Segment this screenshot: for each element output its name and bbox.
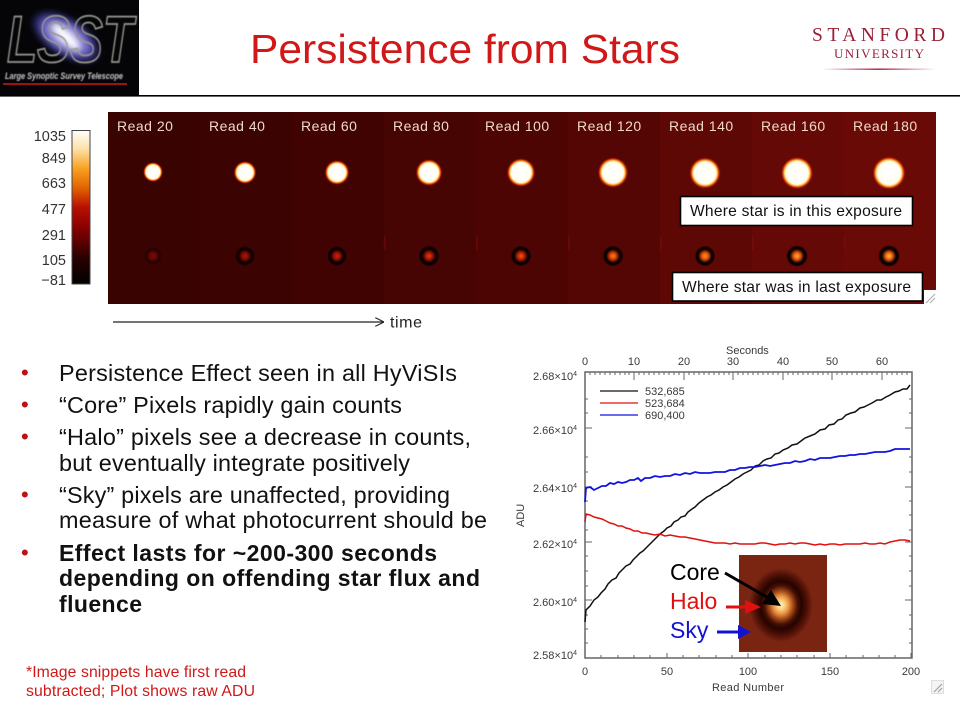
read labels: Read 40	[209, 118, 265, 134]
y axis labels: 2.66×10	[533, 425, 573, 437]
bullet 3: “Halo” pixels see a decrease in counts,	[59, 424, 471, 450]
series legend	[600, 386, 685, 422]
top axis labels: 60	[876, 356, 888, 368]
colour scale bar: 477	[42, 202, 66, 218]
label: Halo with arrow	[670, 588, 761, 614]
footnote: *Image snippets have first read	[26, 664, 246, 681]
colour scale bar: −81	[41, 273, 66, 289]
y axis labels: 4	[573, 371, 577, 378]
label: Halo with arrow: Halo	[670, 588, 717, 614]
label: Core with arrow: Core	[670, 559, 720, 585]
x axis labels: 50	[661, 666, 673, 678]
bullet 4	[21, 482, 487, 533]
label: Core with arrow	[670, 559, 781, 606]
logo: LSST	[0, 0, 139, 95]
y axis labels: 4	[573, 597, 577, 604]
colour scale bar: 849	[42, 151, 66, 167]
logo caption: Large Synoptic Survey Telescope	[5, 71, 124, 82]
x axis labels: 0	[582, 666, 588, 678]
bullet 5: •	[21, 540, 29, 565]
read labels	[117, 118, 918, 134]
bullet 4: measure of what photocurrent should be	[59, 507, 487, 533]
inset: star image with core halo and sky	[739, 555, 827, 652]
footnote: subtracted; Plot shows raw ADU	[26, 683, 255, 700]
top axis labels: 10	[628, 356, 640, 368]
bullet 2: •	[21, 392, 29, 417]
logo letters: LSST	[7, 2, 136, 76]
read labels: Read 60	[301, 118, 357, 134]
bullet 3: •	[21, 424, 29, 449]
top axis labels: 40	[777, 356, 789, 368]
top axis labels	[582, 345, 888, 368]
series legend: 523,684	[645, 398, 685, 410]
top axis labels: 50	[826, 356, 838, 368]
read labels: Read 20	[117, 118, 173, 134]
bullet 5: depending on offending star flux and	[59, 565, 480, 591]
y axis labels	[515, 371, 577, 662]
y axis labels: 2.60×10	[533, 597, 573, 609]
label: Sky with arrow: Sky	[670, 617, 709, 643]
logo: Stanford University: STANFORD	[812, 25, 945, 46]
persistence images from last exposure	[144, 244, 900, 268]
read labels: Read 140	[669, 118, 734, 134]
colour scale bar: 291	[42, 228, 66, 244]
y axis labels: 4	[573, 650, 577, 657]
series: blue sky	[585, 449, 910, 502]
bullet 5: Effect lasts for ~200-300 seconds	[59, 540, 437, 566]
y axis labels: 2.68×10	[533, 371, 573, 383]
bullet 5: fluence	[59, 591, 142, 617]
line chart: ADU vs read number	[515, 345, 920, 694]
callout: current star	[680, 196, 912, 226]
y axis labels: ADU	[515, 504, 527, 527]
top axis labels: 0	[582, 356, 588, 368]
y axis labels: 2.64×10	[533, 483, 573, 495]
colour scale bar: 663	[42, 176, 66, 192]
bullet 3	[21, 424, 471, 476]
series: red halo	[585, 514, 910, 545]
read labels: Read 100	[485, 118, 550, 134]
colour scale bar: 105	[42, 253, 66, 269]
bullet 5	[21, 540, 480, 617]
logo: Stanford University	[812, 25, 945, 70]
image strip: star snapshots per read	[108, 112, 936, 304]
read labels: Read 120	[577, 118, 642, 134]
x axis labels: 150	[821, 666, 839, 678]
resize handle	[924, 290, 936, 304]
current star positions	[143, 156, 906, 190]
colour scale bar: 1035	[34, 129, 66, 145]
y axis labels: 4	[573, 539, 577, 546]
callout: previous star: Where star was in last exposure	[682, 279, 911, 296]
read labels: Read 180	[853, 118, 918, 134]
bullet 4: •	[21, 482, 29, 507]
x axis labels	[582, 666, 920, 694]
bullet 1: Persistence Effect seen in all HyViSIs	[59, 360, 457, 386]
callout: current star: Where star is in this exposure	[690, 203, 902, 220]
read labels: Read 80	[393, 118, 449, 134]
y axis labels: 2.58×10	[533, 650, 573, 662]
footnote	[26, 664, 255, 700]
bullet list	[21, 360, 487, 617]
panel edge streaks	[384, 236, 846, 250]
y axis labels: 4	[573, 425, 577, 432]
arrow: time: time	[390, 314, 422, 332]
bullet 3: but eventually integrate positively	[59, 450, 410, 476]
logo: Stanford University: UNIVERSITY	[834, 46, 925, 61]
x axis labels: 200	[902, 666, 920, 678]
top axis labels: 30	[727, 356, 739, 368]
title: Persistence from Stars	[250, 26, 680, 72]
resize handle	[932, 680, 944, 694]
bullet 1: •	[21, 360, 29, 385]
plot frame and ticks	[585, 372, 912, 658]
top axis labels: Seconds	[726, 345, 769, 357]
label: Sky with arrow	[670, 617, 751, 643]
callout: previous star	[672, 272, 922, 301]
read labels: Read 160	[761, 118, 826, 134]
series legend: 690,400	[645, 410, 685, 422]
x axis labels: 100	[739, 666, 757, 678]
series: black core	[585, 385, 910, 622]
series legend: 532,685	[645, 386, 685, 398]
y axis labels: 4	[573, 483, 577, 490]
x axis labels: Read Number	[712, 682, 784, 694]
bullet 2: “Core” Pixels rapidly gain counts	[59, 392, 402, 418]
bullet 4: “Sky” pixels are unaffected, providing	[59, 482, 450, 508]
top axis labels: 20	[678, 356, 690, 368]
colour scale bar	[34, 129, 90, 289]
logo galaxy	[19, 0, 113, 77]
y axis labels: 2.62×10	[533, 539, 573, 551]
